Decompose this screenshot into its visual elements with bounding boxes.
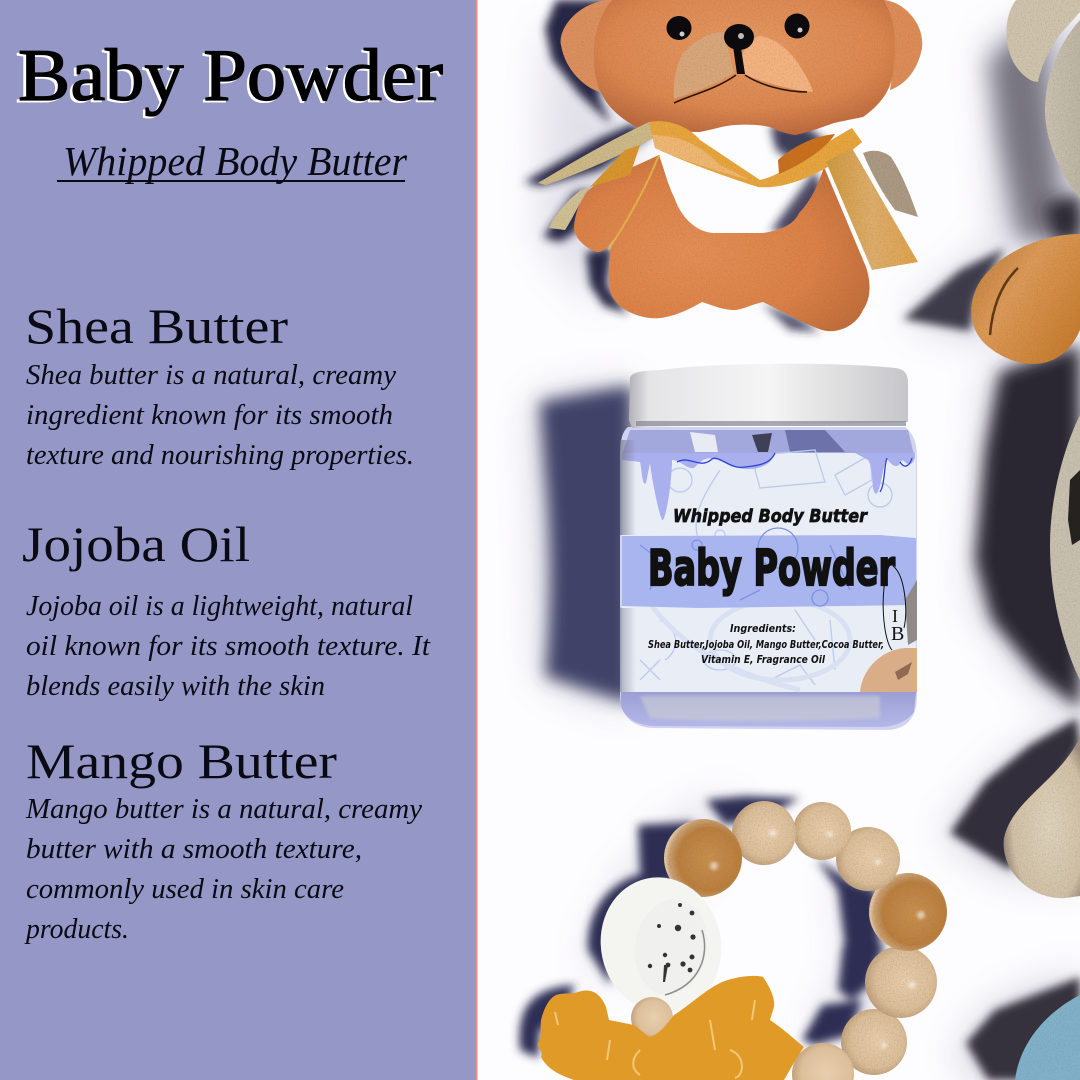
teether toy bbox=[538, 801, 947, 1080]
ingredient: Jojoba Oil: oil known for its smooth texture. It bbox=[26, 630, 431, 662]
bottom cream bbox=[621, 692, 916, 727]
stripe doodles bbox=[640, 528, 850, 606]
ingredient: Mango Butter: butter with a smooth texture, bbox=[26, 833, 362, 865]
blue stripe bbox=[622, 535, 916, 608]
small bead bbox=[631, 997, 673, 1039]
ingredient: Shea Butter: Shea Butter bbox=[25, 298, 288, 354]
ingredient: Mango Butter: commonly used in skin care bbox=[26, 873, 344, 905]
bead highlights bbox=[710, 830, 925, 1048]
plush body bbox=[1050, 415, 1080, 680]
plush paw bbox=[971, 234, 1080, 364]
ingredient: Mango Butter bbox=[24, 733, 422, 945]
teddy ring toy bbox=[538, 0, 922, 331]
jar body bbox=[620, 427, 917, 730]
wooden beads bbox=[664, 801, 947, 1075]
plush foot bbox=[1004, 737, 1080, 898]
bear head bbox=[594, 0, 895, 135]
subtitle: Whipped Body Butter: Whipped Body Butter bbox=[63, 138, 408, 184]
top cream bbox=[622, 430, 914, 455]
teether shadow bbox=[519, 796, 884, 1058]
jar lid bbox=[629, 364, 908, 428]
label ingredients: Ingredients: bbox=[730, 623, 796, 635]
brand monogram bbox=[883, 566, 906, 650]
label ingredients: Vitamin E, Fragrance Oil bbox=[701, 653, 825, 666]
panel: product photo scene bbox=[519, 0, 1080, 1080]
glass edge shading bbox=[620, 440, 636, 535]
right ear bbox=[884, 0, 922, 90]
jar shadow bbox=[540, 385, 632, 704]
jar label bbox=[622, 450, 917, 692]
right scarf tails bbox=[863, 151, 918, 217]
ingredient: Shea Butter: Shea butter is a natural, creamy bbox=[26, 359, 396, 391]
sidebar edge line bbox=[476, 0, 478, 1080]
plush head bbox=[1045, 20, 1080, 198]
orange teether cookie bbox=[538, 976, 804, 1080]
title: Baby Powder: Baby Powder bbox=[18, 35, 443, 117]
bear eyes and nose bbox=[666, 14, 810, 103]
photo background bbox=[477, 0, 1080, 1080]
left scarf tails bbox=[538, 122, 660, 185]
ingredient: Mango Butter: Mango butter is a natural, creamy bbox=[25, 793, 422, 825]
soft lavender halos around the shadows bbox=[535, 10, 1080, 1080]
ingredient: Jojoba Oil: blends easily with the skin bbox=[26, 670, 325, 702]
ingredient: Mango Butter: Mango Butter bbox=[26, 733, 337, 789]
ingredient: Shea Butter: ingredient known for its smooth bbox=[26, 399, 393, 431]
cast shadows of plush toy bbox=[903, 20, 1080, 1080]
ingredient: Jojoba Oil: Jojoba Oil bbox=[22, 516, 250, 572]
bear muzzle bbox=[674, 32, 734, 99]
plush toy on right edge bbox=[971, 0, 1080, 1080]
label paper bbox=[622, 453, 916, 692]
label ingredients: Shea Butter,Jojoba Oil, Mango Butter,Cocoa Butter, bbox=[648, 638, 884, 651]
brand monogram: B bbox=[891, 623, 904, 645]
scarf band bbox=[649, 121, 862, 187]
panel: ingredients sidebar bbox=[0, 0, 478, 1080]
lavender drips bbox=[622, 453, 775, 520]
sidebar background bbox=[0, 0, 476, 1080]
label product name: Baby Powder bbox=[648, 540, 896, 597]
brand monogram: I bbox=[892, 606, 898, 626]
title: Baby Powder: Baby Powder bbox=[15, 37, 441, 119]
plush ear bbox=[1006, 0, 1080, 82]
ingredient: Shea Butter: texture and nourishing properties. bbox=[26, 439, 414, 471]
label heading: whipped body butter: Whipped Body Butter bbox=[673, 506, 868, 527]
blue plush bbox=[1015, 995, 1080, 1080]
bear body bbox=[574, 155, 870, 331]
white charm bbox=[588, 866, 734, 1024]
cast shadow of teddy ring bbox=[524, 0, 830, 332]
ingredient: Shea Butter bbox=[25, 298, 414, 471]
ingredient: Mango Butter: products. bbox=[24, 913, 129, 945]
label doodles bbox=[625, 450, 892, 690]
front bead bbox=[792, 1043, 854, 1080]
baby photo sticker bbox=[860, 580, 917, 692]
ingredient: Jojoba Oil: Jojoba oil is a lightweight, natural bbox=[26, 590, 413, 622]
plush body stitching bbox=[1068, 470, 1080, 545]
left ear bbox=[561, 0, 612, 92]
product jar bbox=[620, 364, 917, 730]
label ingredients bbox=[648, 623, 884, 666]
ingredient: Jojoba Oil bbox=[22, 516, 431, 702]
